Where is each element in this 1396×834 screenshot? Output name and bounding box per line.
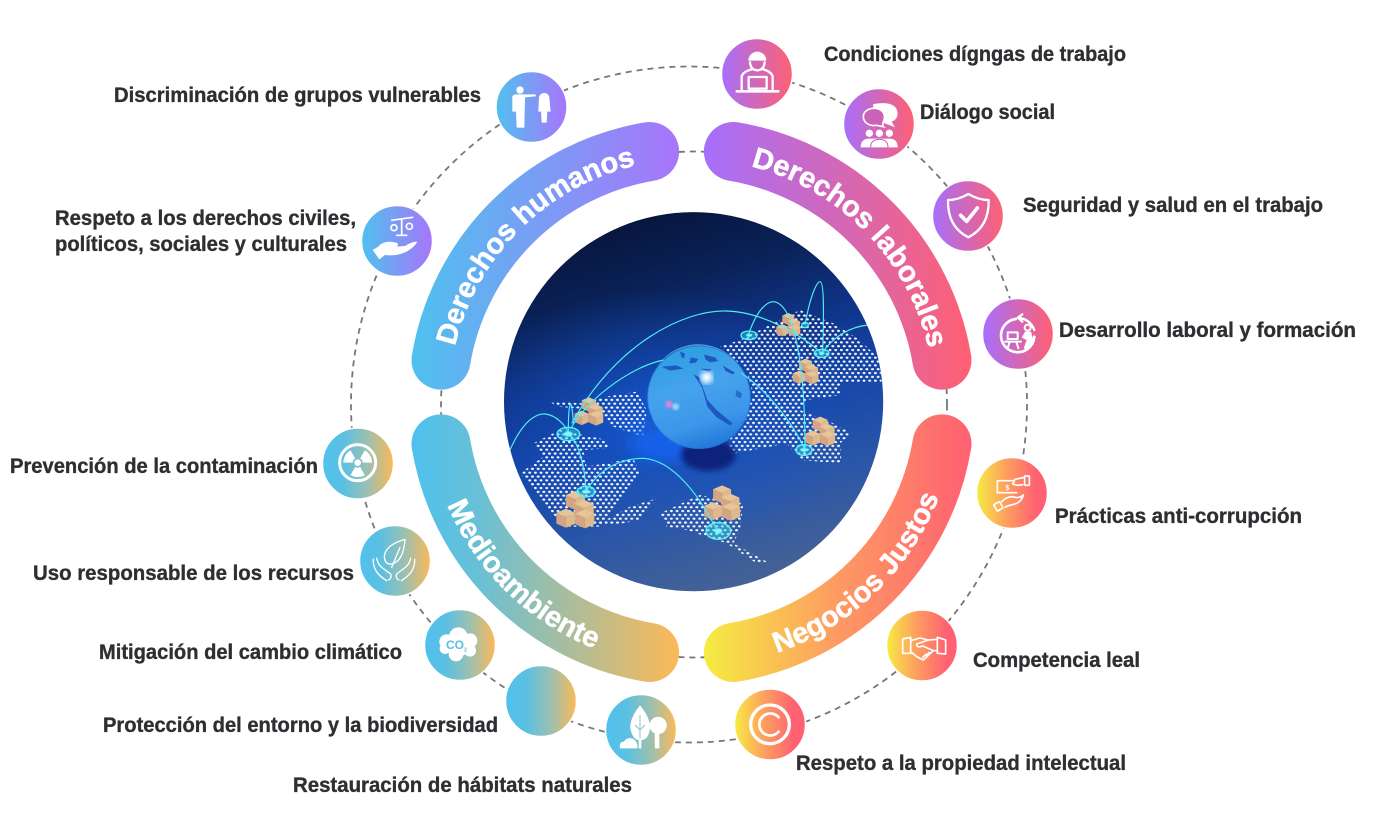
item: Respeto a los derechos civiles [55,206,432,276]
globe glow and shadow [630,425,703,462]
band: Medioambiente [412,414,680,682]
item: Prevención de la contaminación [10,428,394,499]
item: Prevención de la contaminación: Prevención de la contaminación [10,455,318,478]
item: Mitigación del cambio climático: Mitigación del cambio climático [99,641,402,664]
band: Negocios Justos: Negocios Justos [772,494,938,653]
icon: money between hands [994,476,1029,511]
icon: hands holding leaf [373,539,415,581]
dotted continents [520,310,882,563]
icon: shield with check [948,194,989,237]
item: Uso responsable de los recursos: Uso responsable de los recursos [33,562,354,585]
item: Restauración de hábitats naturales [293,694,676,797]
globe [647,346,751,449]
band: Derechos laborales: Derechos laborales [752,147,942,347]
icon: radiation symbol [340,445,376,481]
item: Protección del entorno y la biodiversidad [103,666,576,737]
item: Mitigación del cambio climático [99,610,496,680]
icon: money between hands: $ [1005,483,1009,492]
item: Desarrollo laboral y formación: Desarrollo laboral y formación [1059,319,1356,342]
node centres [564,334,824,534]
item: Respeto a la propiedad intelectual [734,689,1126,775]
icon: worker with helmet at desk [736,52,779,93]
item: Condiciones dignas de trabajo [722,38,1126,110]
band: Derechos humanos [412,122,680,390]
item: Diálogo social [844,88,1055,160]
icon: CO2 cloud: CO [446,638,464,652]
outer dashed ring [351,66,1027,742]
label: Respeto a los derechos civiles, [55,207,356,230]
label [55,207,356,256]
item: Discriminación de grupos vulnerables [114,72,567,142]
label: políticos, sociales y culturales [55,233,347,256]
item: Seguridad y salud en el trabajo: Seguridad y salud en el trabajo [1023,194,1323,217]
item: Desarrollo laboral y formación [982,298,1356,370]
band: Medioambiente: Medioambiente [448,498,598,647]
item: Respeto a la propiedad intelectual: Respeto a la propiedad intelectual [796,752,1126,775]
item: Prácticas anti-corrupción: Prácticas anti-corrupción [1055,505,1302,528]
item: Uso responsable de los recursos [33,526,430,596]
icon: speech bubbles and people [861,103,898,147]
item: Restauración de hábitats naturales: Restauración de hábitats naturales [293,774,632,797]
item: Prácticas anti-corrupción [976,458,1302,528]
item: Competencia leal [886,610,1140,681]
item: Protección del entorno y la biodiversidad: Protección del entorno y la biodiversidad [103,714,498,737]
item: Diálogo social: Diálogo social [920,101,1055,124]
band: Derechos laborales [704,122,972,390]
icon: CO2 cloud: 2 [464,648,467,654]
item: Condiciones dignas de trabajo: Condiciones dígngas de trabajo [824,43,1126,66]
icon: copyright [751,705,789,744]
route nodes [557,322,829,539]
icon: handshake [903,637,946,660]
box clusters [574,397,603,426]
band: Derechos humanos: Derechos humanos [436,152,634,345]
icon: scales over hand [373,217,417,259]
icon: CO2 cloud [439,627,477,661]
item: Competencia leal: Competencia leal [973,649,1140,672]
item: Discriminación de grupos vulnerables: Discriminación de grupos vulnerables [114,84,481,107]
icon: trees [620,705,667,748]
central image: global logistics map [504,212,884,592]
connection arcs [510,282,868,530]
icon: two people pointing [512,86,551,128]
globe continents [650,352,742,440]
item: Seguridad y salud en el trabajo [932,180,1323,252]
inner dashed ring connecting bands [441,152,947,658]
band: Negocios Justos [704,414,972,682]
icon: person at desk in cycle arrow [1001,314,1034,352]
